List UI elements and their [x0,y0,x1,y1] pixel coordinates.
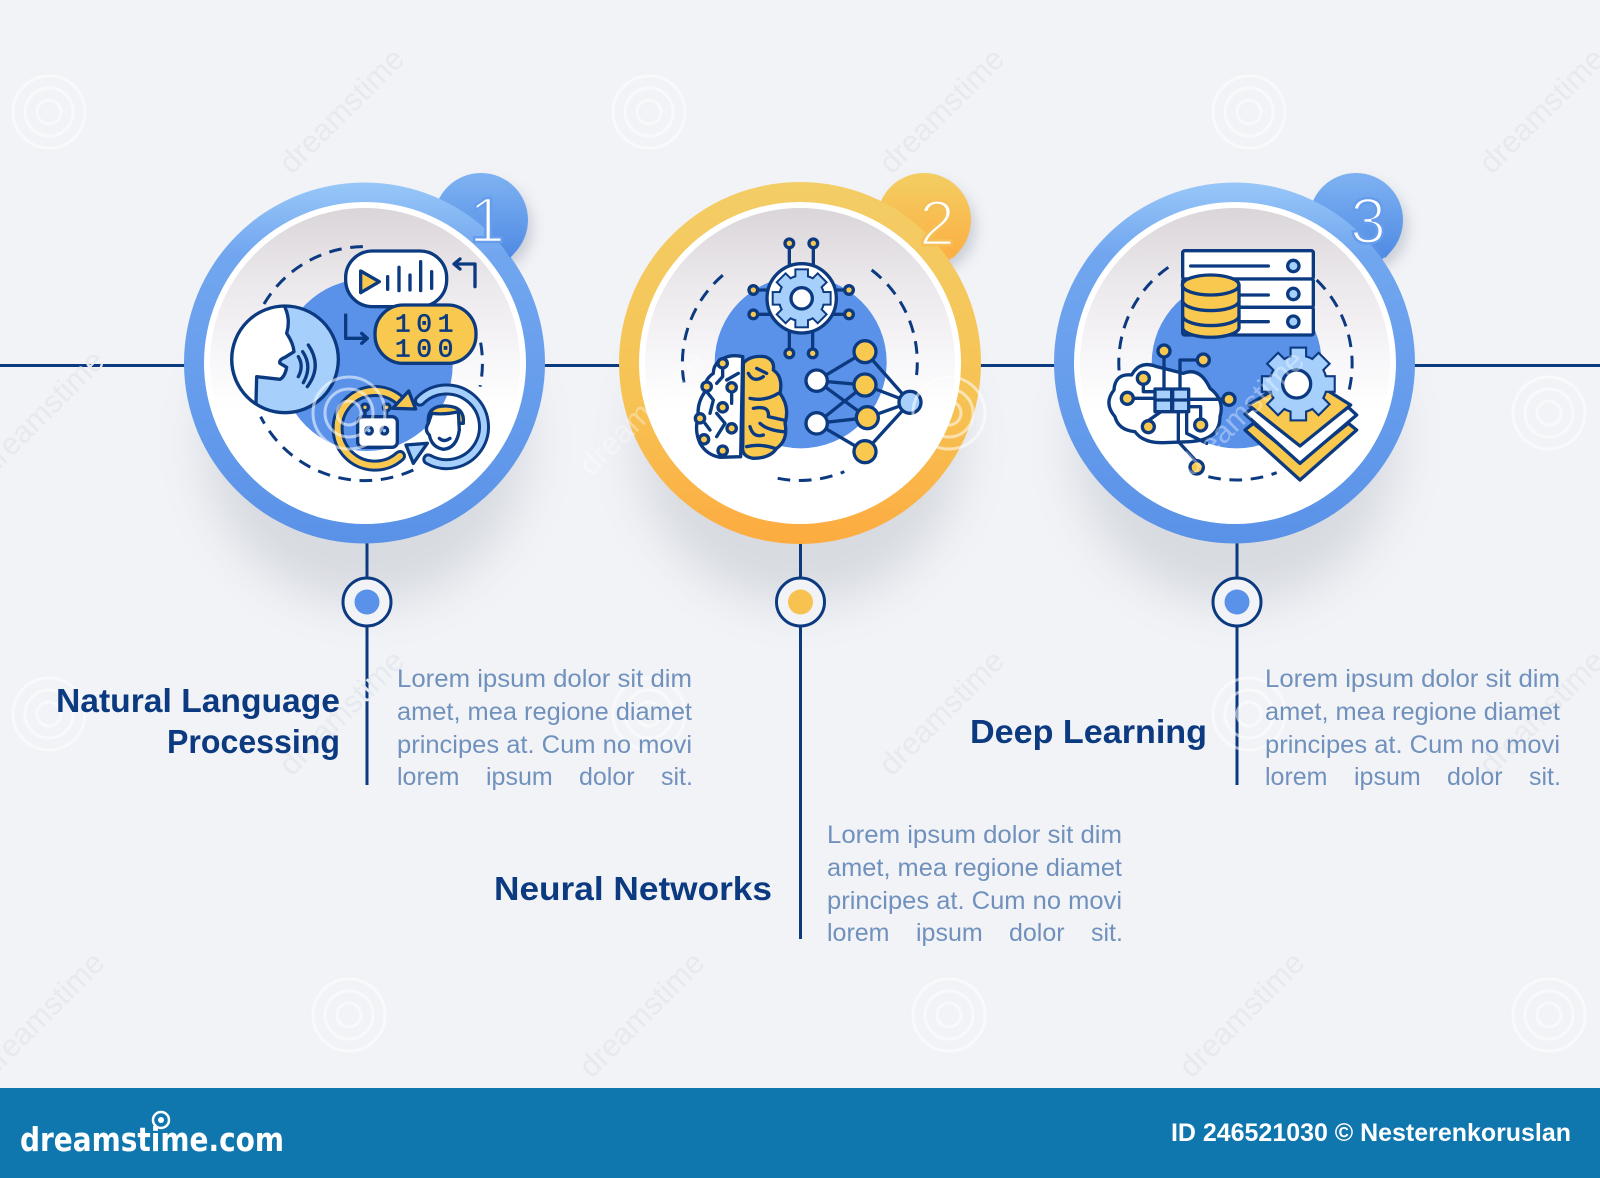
text block 3: dolor [1447,763,1503,791]
icon: human loop [406,389,484,464]
text block 1: principes at. Cum no movi [397,731,692,759]
text block 1: dolor [579,763,635,791]
icon: server rack [1183,251,1313,335]
icon: speaking face [232,306,338,413]
text block 3: amet, mea regione diamet [1265,698,1560,726]
timeline horizontal line [0,364,1600,367]
dashed orbit [682,270,917,480]
heading: Natural Language Processing: Natural Language [56,682,340,719]
watermark text: dreamstime [1172,343,1311,482]
number 2: 2 [919,187,955,259]
text block 2 [827,821,1123,947]
step 3 circle [1054,173,1415,544]
icon: database cylinder [1182,275,1239,337]
footer credit: ID 246521030 © Nesterenkoruslan [1171,1119,1571,1147]
number 1: 1 [469,184,505,256]
text block 2: Lorem ipsum dolor sit dim [827,821,1122,849]
watermark text: dreamstime [1172,945,1311,1084]
dashed orbit [261,247,482,481]
text block 1: Lorem ipsum dolor sit dim [397,665,692,693]
inner disc 3 [1074,202,1396,524]
ring 3 [1054,182,1415,544]
badge overlap 1 [445,177,525,258]
text block 1 [397,665,693,791]
icon: gear hub [749,239,853,358]
text block 2: lorem [827,919,890,947]
badge 2 [877,173,975,274]
badge 3 [1309,173,1407,274]
badge 1 [434,173,532,274]
text block 1: sit. [661,763,693,791]
icon: binary pill: 100 [395,335,453,365]
watermark text: dreamstime [572,343,711,482]
heading: Neural Networks: Neural Networks [494,870,772,907]
footer bar [0,1088,1600,1178]
footer logo: dreamstime.com [20,1120,284,1159]
arrows [346,259,475,343]
dashed orbit [1119,267,1352,480]
blue blob [281,279,453,451]
text block 2: sit. [1091,919,1123,947]
text block 3: lorem [1265,763,1328,791]
text block 3 [1265,665,1561,791]
vertical connectors [367,540,1237,939]
watermark text: dreamstime [272,643,411,782]
text block 3: ipsum [1354,763,1421,791]
node marker 1 [343,578,391,626]
number 3: 3 [1350,185,1386,257]
watermark text: dreamstime [872,41,1011,180]
icon: layers with gear [1245,349,1357,480]
ring 1 [184,182,545,544]
icon: gear, brain and neural network [682,239,921,480]
icon: brain [695,356,787,458]
badge overlap 3 [1320,177,1400,258]
text block 2: amet, mea regione diamet [827,854,1122,882]
icon: circuit brain [1109,345,1235,474]
icon: speech, audio, binary, robot and human [232,247,484,481]
blue blob [1152,278,1322,448]
step 2 circle [619,173,981,544]
blue blob [715,276,887,448]
node marker 2 [776,578,824,626]
icon: audio bubble [346,251,447,307]
text block 2: dolor [1009,919,1065,947]
text block 1: ipsum [486,763,553,791]
text block 1: lorem [397,763,460,791]
watermark text: dreamstime [872,643,1011,782]
text block 3: Lorem ipsum dolor sit dim [1265,665,1560,693]
watermark text: dreamstime [572,945,711,1084]
inner disc 1 [204,202,526,524]
watermark text: dreamstime [272,41,411,180]
heading: Natural Language Processing [56,682,340,760]
icon: database, AI brain and layers [1109,251,1357,480]
badge overlap 2 [888,177,968,258]
text block 2: principes at. Cum no movi [827,887,1122,915]
heading: Natural Language Processing: Processing [167,723,340,760]
text block 3: sit. [1529,763,1561,791]
step 1 circle [184,173,545,544]
heading: Deep Learning: Deep Learning [970,713,1207,750]
inner disc 2 [639,202,961,524]
icon: binary pill: 101 [395,309,453,339]
icon: binary pill [375,305,476,365]
icon: robot loop [338,391,416,466]
drop shadows under circles [204,280,1398,604]
ring 2 [619,182,981,544]
icon: neural network [806,341,921,463]
text block 3: principes at. Cum no movi [1265,731,1560,759]
text block 1: amet, mea regione diamet [397,698,692,726]
node marker 3 [1213,578,1261,626]
text block 2: ipsum [916,919,983,947]
